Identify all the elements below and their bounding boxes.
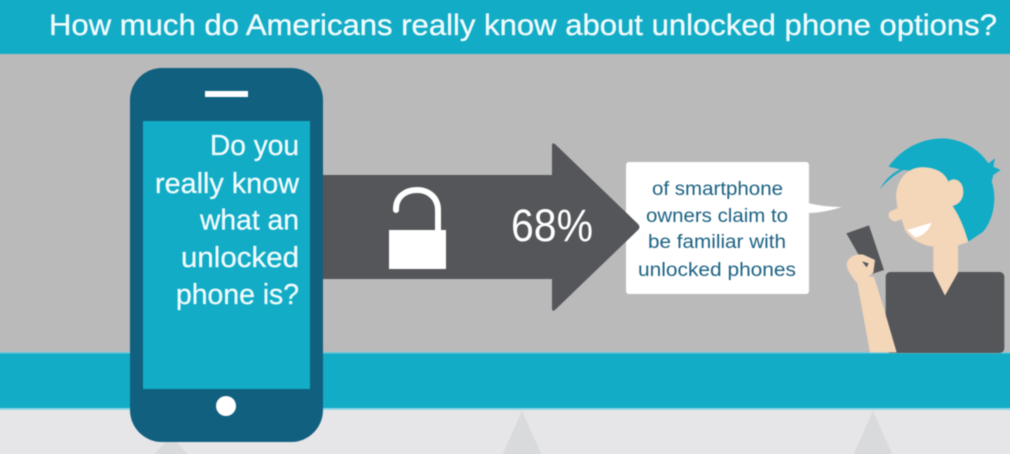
speech bubble box and tail: [626, 162, 842, 294]
arrow: [320, 143, 640, 311]
smile: [907, 223, 932, 237]
phone question text: what an: [199, 204, 299, 236]
icon: open padlock: [389, 190, 446, 269]
handheld phone: [846, 225, 884, 275]
speech bubble text: unlocked phones: [638, 260, 796, 281]
speech bubble text: owners claim to: [646, 206, 788, 227]
title: How much do Americans really know about unlocked phone options?: [49, 9, 997, 42]
hand and arm: [847, 254, 897, 352]
speech bubble text: [638, 179, 796, 281]
bottom light strip with triangles: [0, 409, 1010, 454]
header banner: [0, 0, 1010, 54]
phone question text: really know: [155, 168, 300, 200]
phone question text: unlocked: [181, 242, 299, 274]
phone speaker: [205, 91, 248, 97]
person holding phone: [846, 138, 1004, 353]
phone question text: Do you: [210, 130, 299, 162]
shirt: [886, 272, 1004, 353]
fingertip shadow: [862, 261, 869, 267]
statistic: 68%: 68%: [511, 200, 593, 251]
teal band: [0, 352, 1010, 410]
speech bubble text: of smartphone: [652, 179, 783, 200]
hair: [880, 138, 1001, 242]
phone question text: [155, 130, 300, 311]
speech bubble text: be familiar with: [648, 232, 786, 253]
phone screen: [143, 121, 310, 389]
phone home button: [216, 396, 236, 416]
phone question text: phone is?: [176, 279, 299, 311]
phone: [130, 68, 323, 442]
head and neck: [888, 167, 968, 296]
